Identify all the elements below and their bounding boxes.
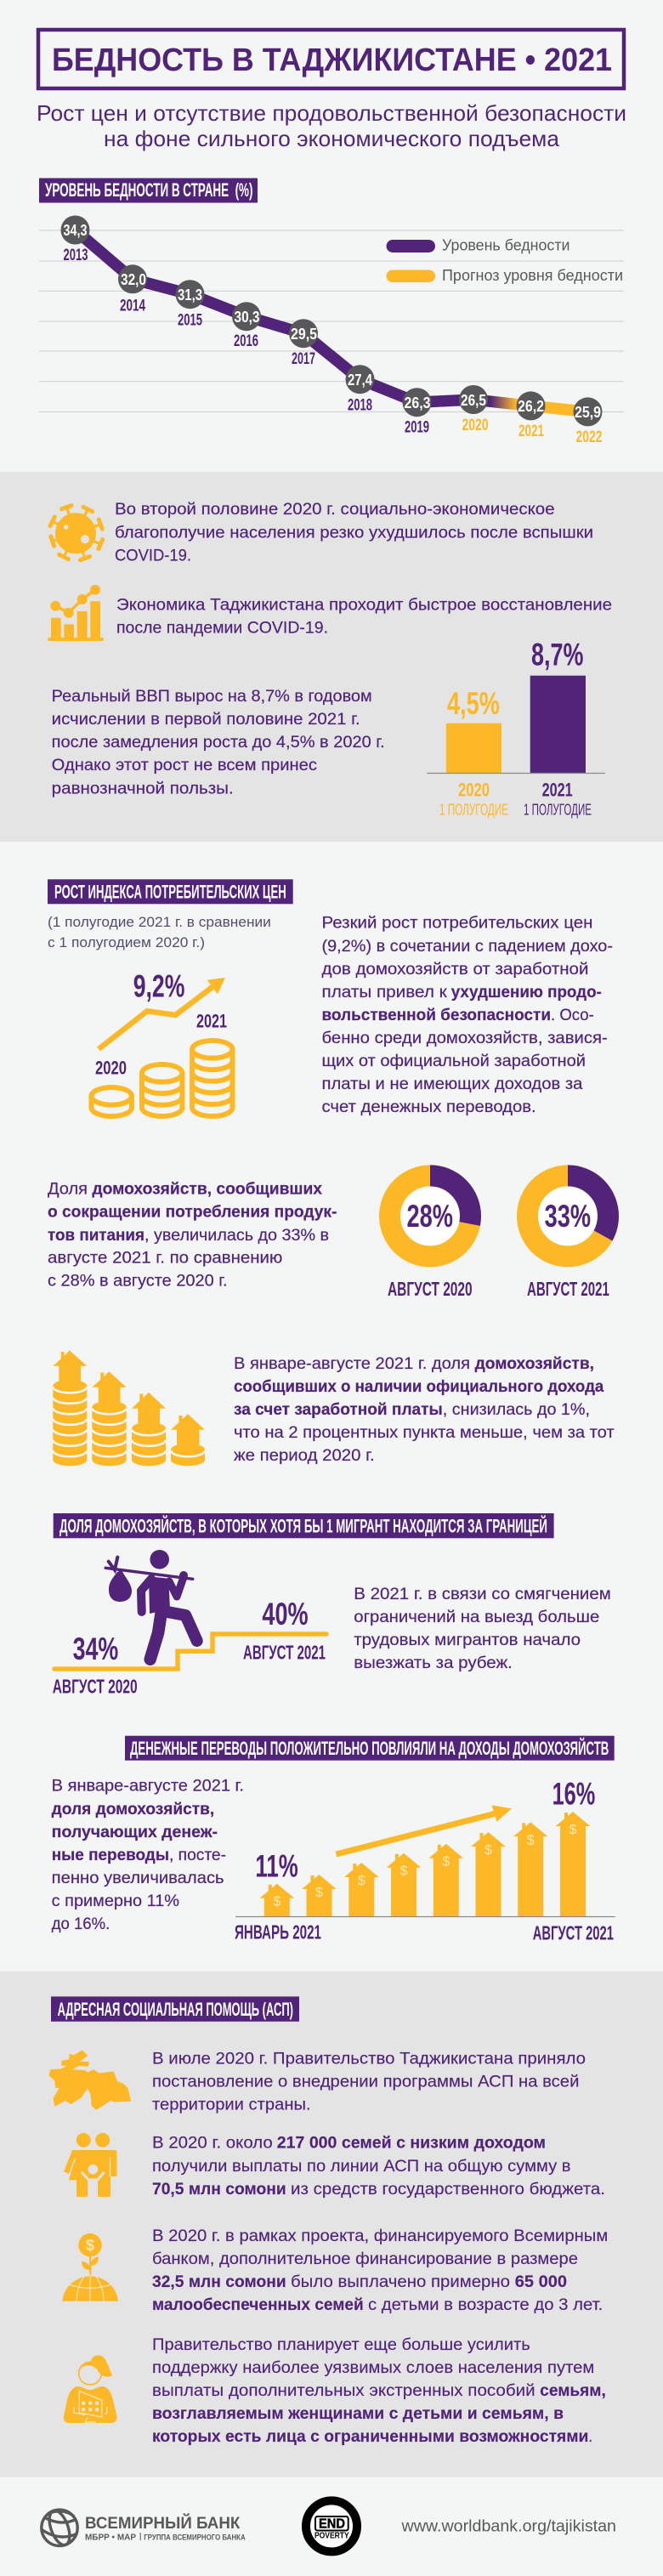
text: food insecurity: щих от официальной заработной xyxy=(321,1053,586,1070)
text: reduced food consumption: о сокращении потребления продук- xyxy=(48,1204,337,1222)
heading: poverty level xyxy=(39,179,258,202)
stair chart: migrants: АВГУСТ 2020 xyxy=(53,1676,138,1698)
text: food insecurity: . Осо- xyxy=(551,1007,594,1024)
bar chart: GDP: 4,5% xyxy=(447,686,500,721)
text: migrants leaving: ограничений на выезд больше xyxy=(354,1609,599,1626)
footer logo: World Bank: ВСЕМИРНЫЙ БАНК xyxy=(85,2512,240,2533)
text: migrants leaving: трудовых мигрантов начало xyxy=(354,1631,581,1649)
icon: growth chart xyxy=(48,585,104,641)
text: program adoption: территории страны. xyxy=(152,2097,311,2114)
data values: 31,3 xyxy=(178,287,202,304)
footer website: www.worldbank.org/tajikistan xyxy=(400,2517,616,2535)
chart: price growth with coins: 2021 xyxy=(196,1010,227,1031)
text: wage income: , снизилась до 1%, xyxy=(443,1401,590,1419)
text: fast recovery: Экономика Таджикистана проходит быстрое восстановление xyxy=(116,596,612,614)
icon: money plant on globe: $ xyxy=(86,2237,94,2254)
text: additional financing xyxy=(152,2227,608,2314)
data values xyxy=(63,222,601,421)
heading: poverty level: УРОВЕНЬ БЕДНОСТИ В СТРАНЕ (%) xyxy=(45,179,253,201)
text: remittances share: получающих денеж- xyxy=(52,1824,218,1841)
donut chart: August 2020: АВГУСТ 2020 xyxy=(388,1278,473,1300)
data values: 27,4 xyxy=(348,372,372,389)
donut chart: August 2020 xyxy=(388,1176,473,1300)
text: food insecurity: платы привел к xyxy=(321,984,447,1001)
donut chart: August 2021: 33% xyxy=(545,1199,591,1234)
text: social deterioration xyxy=(115,501,593,565)
footer logo: World Bank: МБРР • МАР xyxy=(85,2532,136,2542)
chart: house bars for remittances: $ xyxy=(484,1843,492,1858)
icon: map of Tajikistan xyxy=(49,2051,130,2109)
text: food insecurity: вольственной безопасности xyxy=(321,1007,551,1024)
text: food insecurity: платы и не имеющих доходов за xyxy=(321,1075,583,1093)
text: food insecurity xyxy=(321,915,613,1116)
text: social deterioration: COVID-19. xyxy=(115,547,191,565)
text: migrants leaving: выезжать за рубеж. xyxy=(354,1654,513,1672)
text: further support plans: выплаты дополнительных экстренных пособий xyxy=(152,2382,536,2400)
text: reduced food consumption: тов питания xyxy=(48,1227,144,1245)
chart: price growth with coins: 9,2% xyxy=(133,968,184,1003)
donut chart: August 2020: 28% xyxy=(406,1199,453,1234)
chart: house bars for remittances: $ xyxy=(527,1833,535,1847)
text: low-income families: В 2020 г. около xyxy=(152,2135,273,2153)
text: social deterioration: благополучие населения резко ухудшилось после вспышки xyxy=(115,524,593,542)
heading: consumer price index: РОСТ ИНДЕКСА ПОТРЕБИТЕЛЬСКИХ ЦЕН xyxy=(54,882,286,903)
chart: house bars for remittances: $ xyxy=(315,1886,323,1900)
text: reduced food consumption: домохозяйств, сообщивших xyxy=(92,1181,322,1199)
chart: house bars for remittances: ЯНВАРЬ 2021 xyxy=(235,1921,321,1943)
text: GDP growth: равнозначной пользы. xyxy=(52,780,234,797)
bar chart: GDP: 1 ПОЛУГОДИЕ xyxy=(524,802,592,819)
text: CPI comparison note: с 1 полугодием 2020 г.) xyxy=(48,934,205,950)
footer logo: End Poverty: END xyxy=(319,2516,345,2532)
year labels: 2017 xyxy=(292,350,315,368)
icon: woman with tablet xyxy=(64,2355,117,2423)
text: low-income families xyxy=(152,2135,605,2199)
text: program adoption xyxy=(152,2051,586,2114)
text: wage income: В январе-августе 2021 г. доля xyxy=(234,1355,470,1373)
text: further support plans: семьям, xyxy=(540,2382,606,2400)
line: forecast poverty rate xyxy=(473,400,588,411)
text: food insecurity: дов домохозяйств от заработной xyxy=(321,961,588,979)
text: program adoption: постановление о внедрении программы АСП на всей xyxy=(152,2074,579,2091)
title: БЕДНОСТЬ В ТАДЖИКИСТАНЕ • 2021 xyxy=(52,43,612,78)
year labels: 2022 xyxy=(576,428,602,446)
data values: 25,9 xyxy=(575,404,601,421)
text: migrants leaving xyxy=(354,1586,611,1672)
donut chart: August 2021: АВГУСТ 2021 xyxy=(527,1278,609,1300)
data values: 26,2 xyxy=(518,398,544,415)
text: additional financing: с детьми в возрасте до 3 лет. xyxy=(368,2296,603,2314)
icon: coin stacks xyxy=(92,1041,233,1116)
text: program adoption: В июле 2020 г. Правительство Таджикистана приняло xyxy=(152,2051,586,2068)
text: further support plans: возглавляемым женщинами с детьми и семьям, в xyxy=(152,2405,564,2423)
text: GDP growth xyxy=(52,688,385,797)
year labels: 2019 xyxy=(405,419,429,437)
panel: targeted social assistance xyxy=(0,1972,663,2477)
chart: house bars for remittances: $ xyxy=(400,1864,408,1879)
year labels: 2020 xyxy=(462,417,488,434)
text: low-income families: получили выплаты по линии АСП на общую сумму в xyxy=(152,2158,571,2176)
text: food insecurity: счет денежных переводов. xyxy=(321,1098,536,1116)
line chart: poverty rate xyxy=(39,216,624,446)
footer logo: World Bank xyxy=(41,2508,246,2548)
text: wage income: домохозяйств, xyxy=(475,1355,594,1373)
arrow: upward trend xyxy=(336,1805,512,1854)
text: food insecurity: бенно среди домохозяйств, завися- xyxy=(321,1030,608,1047)
line: actual poverty rate xyxy=(75,230,473,402)
text: remittances share: ные переводы xyxy=(52,1847,169,1864)
text: GDP growth: после замедления роста до 4,5% в 2020 г. xyxy=(52,734,385,752)
donut chart: August 2021 xyxy=(527,1176,609,1300)
chart: price growth with coins: 2020 xyxy=(95,1057,127,1078)
text: low-income families: 70,5 млн сомони xyxy=(152,2181,286,2199)
year labels: 2021 xyxy=(518,423,544,440)
legend: Уровень бедности xyxy=(442,237,570,254)
chart: house bars for remittances: $ xyxy=(570,1823,577,1837)
text: remittances share xyxy=(52,1778,244,1933)
text: GDP growth: исчислении в первой половине 2021 г. xyxy=(52,711,360,729)
subtitle: на фоне сильного экономического подъема xyxy=(104,126,560,151)
bar chart: GDP: 8,7% xyxy=(531,638,583,672)
text: further support plans: Правительство планирует еще больше усилить xyxy=(152,2336,530,2354)
text: low-income families: из средств государственного бюджета. xyxy=(291,2181,605,2199)
footer logo: End Poverty: POVERTY xyxy=(314,2532,349,2541)
text: remittances share: доля домохозяйств, xyxy=(52,1801,214,1819)
text: further support plans: . xyxy=(588,2428,592,2446)
year labels: 2018 xyxy=(348,396,372,414)
subtitle xyxy=(37,100,626,151)
icon: globe xyxy=(41,2508,77,2548)
heading: targeted social assistance: АДРЕСНАЯ СОЦИАЛЬНАЯ ПОМОЩЬ (АСП) xyxy=(58,1999,293,2020)
year labels: 2015 xyxy=(178,311,202,329)
text: food insecurity: ухудшению продо- xyxy=(451,984,602,1001)
text: social deterioration: Во второй половине 2020 г. социально-экономическое xyxy=(115,501,555,519)
subtitle: Рост цен и отсутствие продовольственной безопасности xyxy=(37,100,626,126)
chart: house bars for remittances: 16% xyxy=(552,1776,595,1811)
chart: house bars for remittances: $ xyxy=(442,1855,450,1870)
text: low-income families: 217 000 семей с низким доходом xyxy=(277,2135,546,2153)
stair chart: migrants xyxy=(53,1550,326,1698)
icon: houses on falling coin stacks xyxy=(53,1350,205,1466)
data values: 29,5 xyxy=(291,326,317,343)
icon: migrant with bundle xyxy=(105,1550,197,1660)
year labels: 2014 xyxy=(120,298,145,315)
chart: house bars for remittances: $ xyxy=(273,1895,280,1909)
text: wage income: за счет заработной платы xyxy=(234,1401,443,1419)
bar chart: GDP: 2021 xyxy=(542,780,573,801)
panel: economy xyxy=(0,472,663,842)
bar chart: GDP xyxy=(427,638,605,819)
heading: consumer price index xyxy=(48,879,293,904)
stair chart: migrants: 34% xyxy=(73,1631,118,1666)
text: migrants leaving: В 2021 г. в связи со смягчением xyxy=(354,1586,611,1603)
text: remittances share: , посте- xyxy=(169,1847,226,1864)
text: reduced food consumption: августе 2021 г. по сравнению xyxy=(48,1250,282,1268)
text: reduced food consumption xyxy=(48,1181,337,1291)
chart: price growth with coins xyxy=(92,968,233,1116)
text: CPI comparison note: (1 полугодие 2021 г. в сравнении xyxy=(48,914,271,930)
text: CPI comparison note xyxy=(48,914,271,950)
chart: house bars for remittances: 11% xyxy=(255,1848,298,1883)
text: wage income xyxy=(234,1355,615,1465)
data values: 30,3 xyxy=(235,309,260,326)
text: further support plans xyxy=(152,2336,606,2446)
arrow: rising prices xyxy=(99,978,225,1049)
bar chart: GDP: 2020 xyxy=(458,780,490,801)
footer logo: End Poverty xyxy=(306,2500,357,2551)
text: reduced food consumption: , увеличилась до 33% в xyxy=(144,1227,329,1245)
icon: money plant on globe xyxy=(62,2233,118,2301)
text: additional financing: 65 000 xyxy=(515,2273,567,2291)
icon: family xyxy=(64,2133,117,2197)
data values: 32,0 xyxy=(121,271,146,288)
text: fast recovery: после пандемии COVID-19. xyxy=(116,619,328,637)
text: remittances share: пенно увеличивалась xyxy=(52,1870,224,1887)
text: additional financing: 32,5 млн сомони xyxy=(152,2273,286,2291)
title xyxy=(38,30,624,88)
icon: stairs xyxy=(54,1634,326,1669)
text: further support plans: которых есть лица с ограниченными возможностями xyxy=(152,2428,588,2446)
text: GDP growth: Реальный ВВП вырос на 8,7% в годовом xyxy=(52,688,372,706)
text: food insecurity: Резкий рост потребительских цен xyxy=(321,915,592,933)
text: food insecurity: (9,2%) в сочетании с падением дохо- xyxy=(321,938,613,956)
text: wage income: что на 2 процентных пункта меньше, чем за тот xyxy=(234,1424,615,1442)
legend: Прогноз уровня бедности xyxy=(442,267,623,284)
footer logo: World Bank: ГРУППА ВСЕМИРНОГО БАНКА xyxy=(144,2533,246,2542)
text: further support plans: поддержку наиболее уязвимых слоев населения путем xyxy=(152,2359,594,2377)
text: additional financing: банком, дополнительное финансирование в размере xyxy=(152,2250,578,2268)
text: wage income: же период 2020 г. xyxy=(234,1447,375,1465)
legend xyxy=(386,237,623,284)
text: remittances share: В январе-августе 2021 г. xyxy=(52,1778,244,1796)
year labels: 2013 xyxy=(63,247,88,264)
year labels: 2016 xyxy=(234,332,258,350)
text: additional financing: малообеспеченных семей xyxy=(152,2296,364,2314)
bar chart: GDP: 1 ПОЛУГОДИЕ xyxy=(439,802,508,819)
data values: 26,3 xyxy=(405,394,430,411)
text: remittances share: с примерно 11% xyxy=(52,1892,179,1910)
text: wage income: сообщивших о наличии официального дохода xyxy=(234,1378,604,1396)
year labels xyxy=(63,247,602,446)
data values: 34,3 xyxy=(63,222,87,239)
chart: house bars for remittances: АВГУСТ 2021 xyxy=(533,1922,614,1944)
heading: targeted social assistance xyxy=(51,1996,299,2022)
text: reduced food consumption: с 28% в августе 2020 г. xyxy=(48,1273,228,1291)
data values: 26,5 xyxy=(461,392,486,409)
text: additional financing: В 2020 г. в рамках проекта, финансируемого Всемирным xyxy=(152,2227,608,2245)
text: reduced food consumption: Доля xyxy=(48,1181,88,1199)
data points xyxy=(61,216,602,426)
icon: virus xyxy=(50,506,103,560)
stair chart: migrants: 40% xyxy=(262,1597,309,1631)
text: remittances share: до 16%. xyxy=(52,1915,110,1933)
text: additional financing: было выплачено примерно xyxy=(291,2273,510,2291)
text: fast recovery xyxy=(116,596,612,637)
chart: house bars for remittances: $ xyxy=(358,1874,366,1888)
text: GDP growth: Однако этот рост не всем принес xyxy=(52,757,317,775)
stair chart: migrants: АВГУСТ 2021 xyxy=(243,1642,326,1664)
chart: house bars for remittances xyxy=(235,1776,615,1944)
